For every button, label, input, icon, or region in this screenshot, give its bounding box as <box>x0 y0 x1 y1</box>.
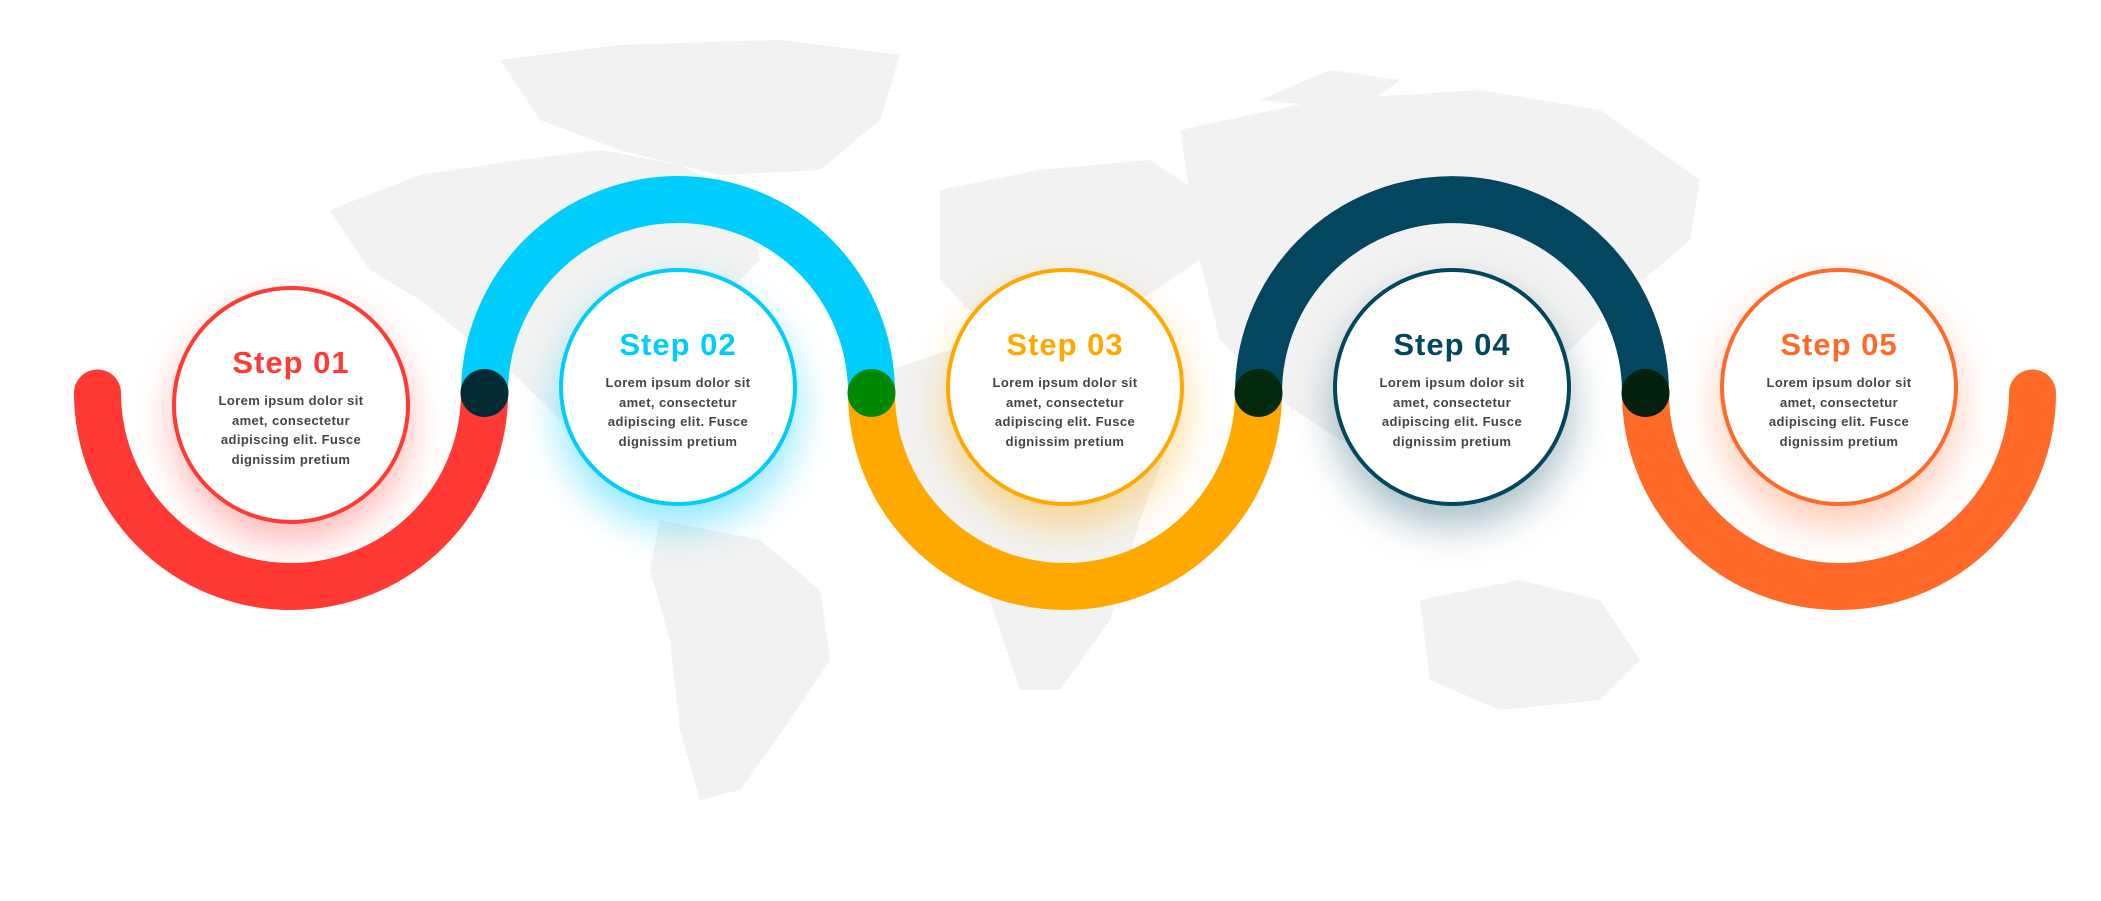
step 02 text: amet, consectetur <box>619 394 737 410</box>
step 04 text <box>1380 375 1524 448</box>
step 05 text: dignissim pretium <box>1780 434 1898 448</box>
step 02 text: Lorem ipsum dolor sit <box>606 375 750 390</box>
step 05 text: Lorem ipsum dolor sit <box>1767 375 1911 390</box>
arc: dark blue <box>1258 200 1646 393</box>
step 03 circle <box>946 268 1184 506</box>
step 01 circle <box>172 286 410 524</box>
step 01 text <box>219 393 363 466</box>
step 03 text: dignissim pretium <box>1006 434 1124 448</box>
step 02 text: adipiscing elit. Fusce <box>608 414 748 429</box>
step 05 heading: Step 05 <box>1780 327 1898 362</box>
step 04 text: dignissim pretium <box>1393 434 1511 448</box>
step 02 text <box>606 375 750 448</box>
arc: yellow <box>872 393 1258 586</box>
step 04 heading: Step 04 <box>1393 327 1511 362</box>
arc: red <box>98 393 484 586</box>
arc: orange <box>1646 393 2032 586</box>
step 01 text: amet, consectetur <box>232 412 350 428</box>
step 03 text: adipiscing elit. Fusce <box>995 414 1135 429</box>
step 01 text: adipiscing elit. Fusce <box>221 432 361 447</box>
step 04 text: adipiscing elit. Fusce <box>1382 414 1522 429</box>
step 03 text: amet, consectetur <box>1006 394 1124 410</box>
step 05 circle <box>1720 268 1958 506</box>
step 01 text: Lorem ipsum dolor sit <box>219 393 363 408</box>
step 01 heading: Step 01 <box>232 345 350 380</box>
step 04 circle <box>1333 268 1571 506</box>
step 03 text <box>993 375 1137 448</box>
arc: blue <box>484 200 872 393</box>
step 02 text: dignissim pretium <box>619 434 737 448</box>
step 05 text: adipiscing elit. Fusce <box>1769 414 1909 429</box>
step 05 text <box>1767 375 1911 448</box>
step 04 text: Lorem ipsum dolor sit <box>1380 375 1524 390</box>
step 01 text: dignissim pretium <box>232 452 350 466</box>
step 03 text: Lorem ipsum dolor sit <box>993 375 1137 390</box>
step 02 circle <box>559 268 797 506</box>
step 05 text: amet, consectetur <box>1780 394 1898 410</box>
connector dots <box>460 369 1670 417</box>
step 02 heading: Step 02 <box>619 327 737 362</box>
step 04 text: amet, consectetur <box>1393 394 1511 410</box>
step 03 heading: Step 03 <box>1006 327 1124 362</box>
